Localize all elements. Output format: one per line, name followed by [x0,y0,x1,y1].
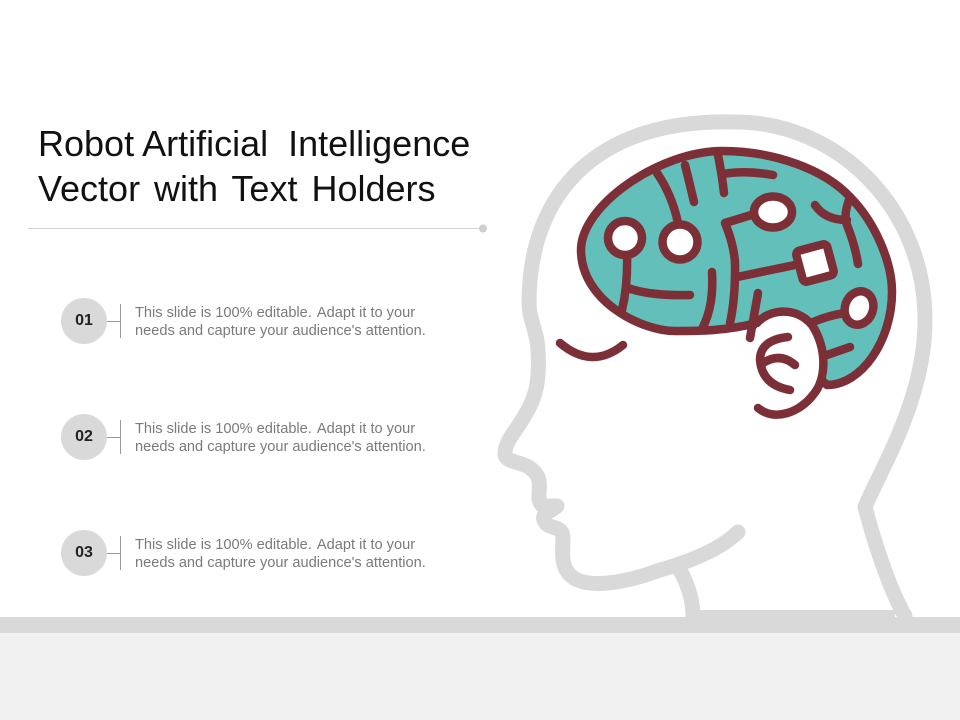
item 03: needs and capture your audience's attention. [135,554,426,570]
item 01: 01 [75,312,93,329]
item 02: This slide is 100% editable. Adapt it to your [135,420,415,436]
brain [560,151,892,415]
ear [757,313,824,414]
brain lobe [581,151,892,385]
title [38,123,470,209]
item 02: 02 [75,428,93,445]
footer band [0,617,960,720]
item 02 [61,414,426,460]
circuit nodes [608,196,878,329]
title: Robot Artificial Intelligence [38,123,470,164]
head outline [505,122,925,616]
item 03: 03 [75,544,93,561]
item 01 [61,298,426,344]
circuit traces [622,155,858,355]
item 01: needs and capture your audience's attention. [135,322,426,338]
item 01: This slide is 100% editable. Adapt it to your [135,304,415,320]
item 03: This slide is 100% editable. Adapt it to your [135,536,415,552]
closed eye [560,343,623,357]
item 03 [61,530,426,576]
title: Vector with Text Holders [38,168,436,209]
item 02: needs and capture your audience's attention. [135,438,426,454]
